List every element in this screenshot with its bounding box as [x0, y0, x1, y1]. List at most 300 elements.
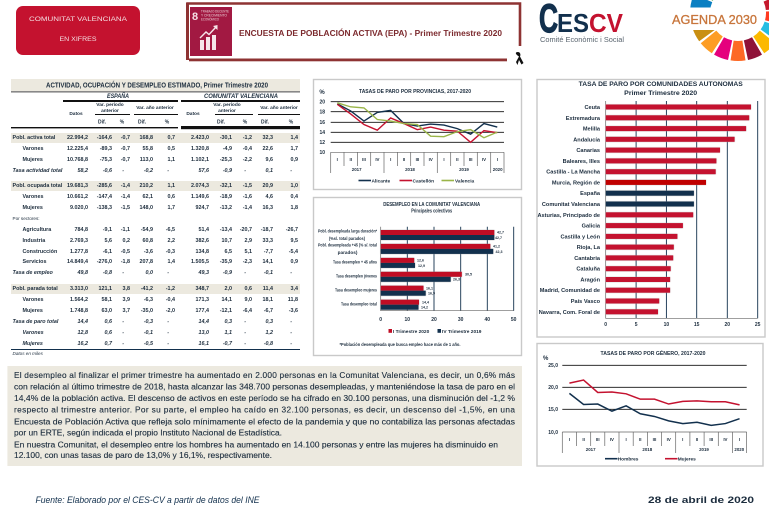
legend	[358, 178, 475, 184]
data table: -	[122, 319, 124, 325]
data table: 33,3	[262, 238, 273, 244]
data table: 60,8	[142, 238, 153, 244]
data table: Tasa de empleo	[12, 270, 53, 276]
data table: 2.769,3	[70, 238, 88, 244]
data table: 9.020,0	[70, 205, 88, 211]
panel: unemployment by gender line chart: IV	[610, 437, 614, 442]
data table: 12.225,4	[67, 146, 88, 152]
panel: unemployment main groups bar chart: 12,6	[417, 258, 424, 262]
panel: unemployment by autonomous community bar chart: 25	[755, 322, 761, 328]
panel: unemployment by gender line chart: 2019	[699, 447, 709, 452]
date: 28 de abril de 2020	[648, 495, 754, 506]
data table: 1.149,6	[191, 194, 209, 200]
table header: activity, employment and unemployment: %	[289, 120, 294, 126]
panel: unemployment by gender line chart: TASAS DE PARO POR GÉNERO, 2017-2020	[600, 349, 706, 357]
data table: -89,3	[100, 146, 112, 152]
data table: 0,9	[290, 259, 298, 265]
data table: -	[244, 330, 246, 336]
data table: -1,2	[166, 286, 175, 292]
panel: unemployment by province line chart: 2020	[493, 167, 503, 172]
panel: unemployment main groups bar chart: 16,9	[428, 292, 435, 296]
data table: 2,9	[244, 238, 252, 244]
data table: Pobl. activa total	[12, 135, 55, 141]
data table: 1,7	[168, 205, 175, 211]
panel: unemployment by province line chart: I	[337, 157, 338, 162]
data table: 16,2	[78, 341, 88, 347]
data table: -7,7	[264, 249, 273, 255]
data table: -41,2	[141, 286, 153, 292]
data table: 0,5	[168, 146, 175, 152]
panel: unemployment by province line chart: IV	[375, 157, 380, 162]
panel: unemployment by gender line chart: I	[625, 437, 627, 442]
data table: Construcción	[22, 249, 57, 255]
panel: unemployment by province line chart: IV	[482, 157, 486, 162]
panel: unemployment by autonomous community bar chart: Madrid, Comunidad de	[540, 288, 600, 294]
table header: activity, employment and unemployment: ESPAÑA	[107, 93, 129, 100]
panel: unemployment by autonomous community bar chart: Andalucía	[573, 137, 601, 143]
data table: 49,8	[78, 270, 88, 276]
data table: -	[122, 341, 124, 347]
panel: unemployment by gender line chart: I	[569, 437, 570, 442]
data table: -1,4	[121, 194, 130, 200]
data table: 1.505,5	[191, 259, 209, 265]
data table: 51,4	[198, 227, 209, 233]
table header: activity, employment and unemployment: Datos	[69, 111, 83, 117]
table header: activity, employment and unemployment: anterior	[101, 108, 119, 114]
panel: unemployment main groups bar chart: 41,2	[493, 244, 500, 248]
panel: unemployment main groups bar chart: (%s/. total parados)	[329, 236, 365, 241]
table header: activity, employment and unemployment: Var. período	[213, 102, 241, 108]
panel: unemployment by province line chart: III	[416, 157, 419, 162]
table header: activity, employment and unemployment: ACTIVIDAD, OCUPACIÓN Y DESEMPLEO ESTIMADO, Primer Trimestre 2020	[46, 80, 268, 90]
data table: -0,1	[144, 330, 153, 336]
data table: 1.320,8	[191, 146, 209, 152]
panel: unemployment main groups bar chart: 42,7	[497, 230, 504, 234]
panel: unemployment by province line chart: II	[403, 157, 405, 162]
table header: activity, employment and unemployment: Datos	[186, 111, 200, 117]
data table: 0,4	[290, 194, 298, 200]
data table: -2,2	[243, 157, 252, 163]
data table: Servicios	[22, 259, 46, 265]
panel: unemployment main groups bar chart: Pobl. desempleada +45 (% s/. total	[318, 242, 377, 248]
panel: unemployment by province line chart: 2019	[459, 167, 469, 172]
table header: activity, employment and unemployment: %	[120, 120, 125, 126]
data table: 210,2	[140, 183, 153, 189]
icon: SDG 8 decent work: Y CRECIMIENTO	[201, 14, 228, 18]
data table: 16,1	[198, 341, 209, 347]
panel: unemployment by gender line chart: %	[543, 356, 549, 362]
footnote: *Población desempleada que busca empleo hace más de 1 año.	[340, 342, 460, 348]
panel: unemployment by gender line chart: IV	[723, 437, 728, 442]
data table: -0,9	[223, 270, 232, 276]
data table: 382,6	[196, 238, 209, 244]
data table: -1,5	[243, 183, 252, 189]
data table: -0,6	[103, 168, 112, 174]
text block: commentary: Encuesta de Población Activa que refleja solo mínimamente el efecto de la pandemia y que no contabiliza las personas afectadas	[14, 416, 515, 426]
panel: unemployment by autonomous community bar chart: Navarra, Com. Foral de	[539, 310, 600, 316]
panel: unemployment main groups bar chart: 26,3	[453, 278, 460, 282]
data table: -6,3	[144, 297, 153, 303]
data table: 19.681,3	[67, 183, 88, 189]
data table: 0,6	[168, 194, 175, 200]
data table: 1,0	[290, 183, 298, 189]
data table: -0,3	[166, 249, 175, 255]
data table: 1.277,8	[70, 249, 88, 255]
data table: -	[167, 319, 169, 325]
data table: 0,6	[104, 330, 112, 336]
data table: 1,1	[224, 330, 232, 336]
data table: -0,3	[144, 319, 153, 325]
legend: Valencia	[455, 178, 475, 184]
data table: 1,7	[290, 146, 298, 152]
data table: -0,9	[223, 168, 232, 174]
data table: -0,4	[166, 297, 175, 303]
data table: -	[244, 168, 246, 174]
data table: -35,0	[141, 308, 153, 314]
data table: Varones	[22, 297, 43, 303]
data table: 4,6	[266, 194, 273, 200]
data table: 1,4	[290, 135, 298, 141]
data table: -13,4	[220, 227, 232, 233]
data table: -164,6	[97, 135, 112, 141]
legend: I Trimestre 2020	[393, 329, 430, 335]
data table: 10.768,8	[67, 157, 88, 163]
panel: unemployment by autonomous community bar chart: 10	[664, 322, 669, 328]
panel: unemployment by province line chart: 18	[319, 110, 325, 116]
data table: -1,8	[121, 259, 130, 265]
legend: Hombres	[618, 457, 639, 463]
line: Hombres	[569, 393, 740, 425]
data table: 5,1	[244, 249, 252, 255]
table header: activity, employment and unemployment: %	[165, 120, 170, 126]
data table: -1,2	[243, 135, 252, 141]
panel: unemployment by autonomous community bar chart: País Vasco	[571, 299, 601, 305]
data table: -1,1	[121, 227, 130, 233]
data table: 22.994,2	[67, 135, 88, 141]
panel: unemployment by autonomous community bar chart	[537, 80, 765, 337]
legend	[605, 457, 696, 463]
panel: unemployment main groups bar chart: Tasa desempleo total	[341, 302, 377, 306]
logo: CESCV: ES	[557, 8, 589, 38]
panel: unemployment by autonomous community bar chart: España	[580, 191, 601, 197]
data table: -	[122, 168, 124, 174]
panel: unemployment by province line chart: 12	[319, 140, 325, 146]
data table: 32,3	[262, 135, 273, 141]
data table: 2.074,3	[191, 183, 209, 189]
data table: 177,4	[196, 308, 209, 314]
data table: -1,4	[243, 205, 252, 211]
data table: -	[290, 330, 292, 336]
data table: Mujeres	[22, 308, 43, 314]
line: Castellón	[337, 104, 497, 142]
data table: 58,2	[78, 168, 88, 174]
data table: 10,7	[222, 238, 232, 244]
data table: 62,1	[142, 194, 153, 200]
panel: unemployment by autonomous community bar chart: Comunitat Valenciana	[542, 202, 601, 208]
text block: commentary: 12.100, con unas tasas de paro de 13,0% y 16,1%, respectivamente.	[14, 450, 272, 460]
data table: -6,7	[264, 308, 273, 314]
data table: 14.849,4	[67, 259, 88, 265]
data table: 10.661,2	[67, 194, 88, 200]
data table: 3,8	[122, 286, 130, 292]
data table: 20,9	[262, 183, 273, 189]
panel: unemployment main groups bar chart: Principales colectivos	[411, 209, 452, 215]
panel: unemployment by autonomous community bar chart: Aragón	[580, 278, 601, 284]
data table: -3,6	[289, 308, 298, 314]
table header: activity, employment and unemployment: anterior	[218, 108, 236, 114]
line: Valencia	[337, 103, 497, 138]
data table: -18,7	[261, 227, 273, 233]
data table: -3,6	[144, 249, 153, 255]
panel: unemployment by province line chart: 10	[319, 150, 325, 156]
panel: unemployment by autonomous community bar chart: Extremadura	[566, 116, 601, 122]
panel: unemployment by gender line chart: III	[596, 437, 600, 442]
text block: commentary: con relación al último trimestre de 2018, hasta alcanzar las 348.700 personas desempleadas, y manteniéndose la tasa de paro en el	[14, 382, 515, 392]
panel: unemployment main groups bar chart: 30	[458, 317, 464, 323]
line: Mujeres	[569, 380, 740, 405]
table header: activity, employment and unemployment: %	[243, 120, 248, 126]
panel: unemployment by autonomous community bar chart: Rioja, La	[577, 245, 601, 251]
data table: 49,3	[198, 270, 209, 276]
data table: 11,8	[288, 297, 298, 303]
panel: unemployment main groups bar chart: 12,9	[418, 264, 425, 268]
icon: SDG 8 decent work: ECONÓMICO	[201, 16, 219, 22]
panel: unemployment by province line chart: II	[349, 157, 352, 162]
data table: -0,2	[144, 168, 153, 174]
data table: 0,7	[104, 341, 112, 347]
data table: Varones	[22, 194, 43, 200]
data table: Pobl. ocupada total	[12, 183, 62, 189]
panel: unemployment main groups bar chart: Tasa desempleo + 45 años	[333, 260, 377, 264]
data table: 0,6	[104, 319, 112, 325]
panel: unemployment by gender line chart: II	[639, 437, 642, 442]
panel: unemployment by gender line chart: IV	[667, 437, 671, 442]
panel: unemployment main groups bar chart	[314, 198, 522, 356]
panel: unemployment main groups bar chart: Pobl. desempleada larga duración*	[318, 228, 377, 234]
data table: Mujeres	[22, 157, 43, 163]
panel: unemployment by autonomous community bar chart: Ceuta	[584, 105, 601, 111]
table header: activity, employment and unemployment: COMUNITAT VALENCIANA	[204, 94, 278, 100]
data table: 0,0	[146, 270, 153, 276]
data table: -12,1	[220, 308, 232, 314]
data table: Mujeres	[22, 205, 43, 211]
badge: Comunitat Valenciana en xifres: COMUNITAT VALENCIANA	[29, 16, 128, 23]
legend	[388, 329, 482, 335]
data table: 18,1	[262, 297, 273, 303]
panel: unemployment main groups bar chart: Tasa desempleo mujeres	[335, 288, 377, 292]
text block: commentary: 14,4% de la población activa. El descenso de activos en este período se ha cifrado en 30.100 personas, una disminución del -1,2 %	[14, 393, 516, 403]
data table: 2.423,0	[191, 135, 209, 141]
data table: -4,9	[223, 146, 232, 152]
panel: unemployment by autonomous community bar chart: Castilla - La Mancha	[546, 170, 601, 176]
data table: -9,1	[103, 227, 112, 233]
data table: Tasa de paro total	[12, 319, 58, 325]
icon: SDG 8 decent work	[190, 7, 232, 56]
panel: unemployment by province line chart: 16	[319, 120, 325, 126]
panel: unemployment by province line chart: I	[497, 157, 498, 162]
data table: -6,1	[103, 249, 112, 255]
data table: -	[167, 330, 169, 336]
data table: -18,9	[220, 194, 232, 200]
data table: Tasa actividad total	[12, 168, 62, 174]
data table: -	[244, 270, 246, 276]
panel: unemployment by autonomous community bar chart: Cataluña	[576, 267, 601, 273]
data table: 148,0	[140, 205, 153, 211]
data table: -32,1	[220, 183, 232, 189]
panel: unemployment by gender line chart: I	[682, 437, 683, 442]
panel: unemployment by province line chart: III	[469, 157, 473, 162]
data table: -1,4	[121, 183, 130, 189]
data table: 16,3	[262, 205, 273, 211]
data table: -20,7	[240, 227, 252, 233]
panel: unemployment by province line chart: I	[390, 157, 391, 162]
data table: 13,0	[198, 330, 209, 336]
text block: commentary: por un ERTE, según indicada el propio Instituto Nacional de Estadística.	[14, 428, 282, 438]
data table: 1,4	[168, 259, 175, 265]
logo: Agenda 2030	[672, 0, 771, 67]
data table: -13,2	[220, 205, 232, 211]
panel: unemployment by autonomous community bar chart: Baleares, Illes	[563, 159, 600, 165]
legend: Alicante	[372, 178, 390, 184]
data table: -0,5	[144, 341, 153, 347]
panel: unemployment main groups bar chart: 40	[485, 317, 490, 323]
icon: mourning ribbon	[516, 52, 524, 65]
data table: 207,8	[140, 259, 153, 265]
panel: unemployment by gender line chart: III	[709, 437, 713, 442]
panel: unemployment main groups bar chart: 14,4	[422, 300, 429, 304]
data table: 1.748,8	[70, 308, 88, 314]
data table: -0,8	[103, 270, 112, 276]
data table: 3,9	[122, 297, 130, 303]
data table: -0,7	[121, 146, 130, 152]
data table: 9,5	[290, 238, 298, 244]
data table: -26,7	[286, 227, 298, 233]
table header: activity, employment and unemployment: Var. año anterior	[260, 105, 298, 111]
data table: 1,1	[168, 157, 175, 163]
panel: unemployment by gender line chart: 10,0	[548, 430, 558, 436]
panel: unemployment by autonomous community bar chart: Primer Trimestre 2020	[624, 90, 698, 97]
panel: unemployment by autonomous community bar chart: Canarias	[576, 148, 600, 154]
panel: unemployment by autonomous community bar chart: Cantabria	[574, 256, 601, 262]
data table: -	[122, 270, 124, 276]
table header: activity, employment and unemployment: Dif.	[98, 120, 107, 126]
data table: -285,6	[97, 183, 112, 189]
data table: 168,8	[140, 135, 153, 141]
text block: commentary: respecto al trimestre anterior. Por su parte, el empleo ha caído en 32.100 personas, es decir, un descenso del -1,5%, en una	[14, 405, 515, 415]
data table: 1.102,1	[191, 157, 209, 163]
data table: -35,9	[220, 259, 232, 265]
panel: unemployment by autonomous community bar chart: Asturias, Principado de	[538, 213, 600, 219]
logo: Agenda 2030: AGENDA 2030	[672, 12, 757, 27]
legend: Mujeres	[678, 457, 696, 463]
panel: unemployment main groups bar chart: 14,2	[421, 306, 428, 310]
data table: -6,4	[243, 308, 252, 314]
panel: unemployment main groups bar chart: Tasa desempleo jóvenes	[336, 274, 377, 278]
panel: unemployment by autonomous community bar chart: 20	[725, 322, 730, 328]
data table: 2,0	[224, 286, 232, 292]
data table: Agricultura	[22, 227, 51, 233]
panel: unemployment by province line chart: 14	[319, 130, 325, 136]
data table: 58,1	[102, 297, 112, 303]
panel: unemployment main groups bar chart: 42,3	[496, 250, 502, 254]
panel: unemployment by gender line chart: 25,0	[548, 363, 558, 369]
data table: -	[167, 168, 169, 174]
panel: unemployment by province line chart: I	[443, 157, 445, 162]
data table: -25,3	[220, 157, 232, 163]
panel: unemployment main groups bar chart: 50	[511, 317, 517, 323]
panel: unemployment by autonomous community bar chart: Castilla y León	[561, 234, 601, 240]
badge: Comunitat Valenciana en xifres: EN XIFRES	[60, 36, 97, 43]
panel: unemployment main groups bar chart: 20	[431, 317, 437, 323]
data table: 0,6	[244, 286, 252, 292]
data table: 9,6	[266, 157, 273, 163]
panel: unemployment by gender line chart: 2020	[734, 447, 745, 452]
data table: -0,5	[121, 249, 130, 255]
panel: unemployment main groups bar chart: 42,7	[495, 236, 502, 240]
data table: 784,8	[74, 227, 88, 233]
data table: -	[167, 270, 169, 276]
data table: Varones	[22, 146, 43, 152]
data table: -2,3	[243, 259, 252, 265]
panel: unemployment by province line chart	[314, 80, 522, 190]
data table: -138,3	[97, 205, 112, 211]
panel: unemployment by province line chart: 20	[319, 100, 325, 106]
data table: 171,3	[196, 297, 209, 303]
logo: CESCV: Comité Econòmic i Social	[540, 35, 624, 44]
data table: 1,2	[266, 330, 273, 336]
data table: -0,7	[121, 157, 130, 163]
data table: -	[122, 330, 124, 336]
data table: 134,8	[196, 249, 209, 255]
data table: 1,1	[168, 183, 175, 189]
data table: 14,1	[262, 259, 273, 265]
data table: -0,7	[121, 135, 130, 141]
panel: unemployment by autonomous community bar chart: Galicia	[582, 224, 601, 230]
data table: -	[244, 341, 246, 347]
data table: 0,7	[168, 135, 175, 141]
panel: unemployment main groups bar chart: 16,1	[426, 286, 433, 290]
data table: 5,6	[104, 238, 112, 244]
panel: unemployment by autonomous community bar chart: Murcia, Región de	[552, 180, 600, 186]
data table: -0,1	[264, 270, 273, 276]
panel: unemployment by province line chart: IV	[429, 157, 433, 162]
panel: unemployment by gender line chart: II	[582, 437, 585, 442]
panel: unemployment by province line chart: III	[362, 157, 366, 162]
title box	[188, 3, 520, 61]
source note: Fuente: Elaborado por el CES-CV a partir de datos del INE	[36, 495, 260, 505]
panel: unemployment by gender line chart: 20,0	[548, 385, 558, 391]
panel: unemployment by province line chart: 2017	[352, 167, 362, 172]
data table: Por sectores:	[12, 216, 40, 221]
data table: -	[167, 341, 169, 347]
panel: unemployment by gender line chart	[537, 344, 763, 466]
icon: SDG 8 decent work: TRABAJO DECENTE	[201, 10, 229, 14]
badge: Comunitat Valenciana en xifres	[16, 6, 140, 55]
data table: -2,0	[166, 308, 175, 314]
data table: 3.313,0	[70, 286, 88, 292]
logo: CESCV	[539, 0, 624, 44]
data table: 9,0	[244, 297, 252, 303]
panel: unemployment main groups bar chart: DESEMPLEO EN LA COMUNITAT VALENCIANA	[383, 202, 480, 208]
panel: unemployment by gender line chart: II	[696, 437, 698, 442]
table header: activity, employment and unemployment: Var. período	[96, 102, 124, 108]
heading: ENCUESTA DE POBLACIÓN ACTIVA (EPA) - Primer Trimestre 2020	[239, 27, 502, 38]
table header: activity, employment and unemployment: Dif.	[261, 120, 270, 126]
legend: IV Trimestre 2019	[442, 329, 482, 335]
table header: activity, employment and unemployment: Dif.	[138, 120, 147, 126]
data table: -0,8	[264, 341, 273, 347]
data table: 1,8	[290, 205, 298, 211]
